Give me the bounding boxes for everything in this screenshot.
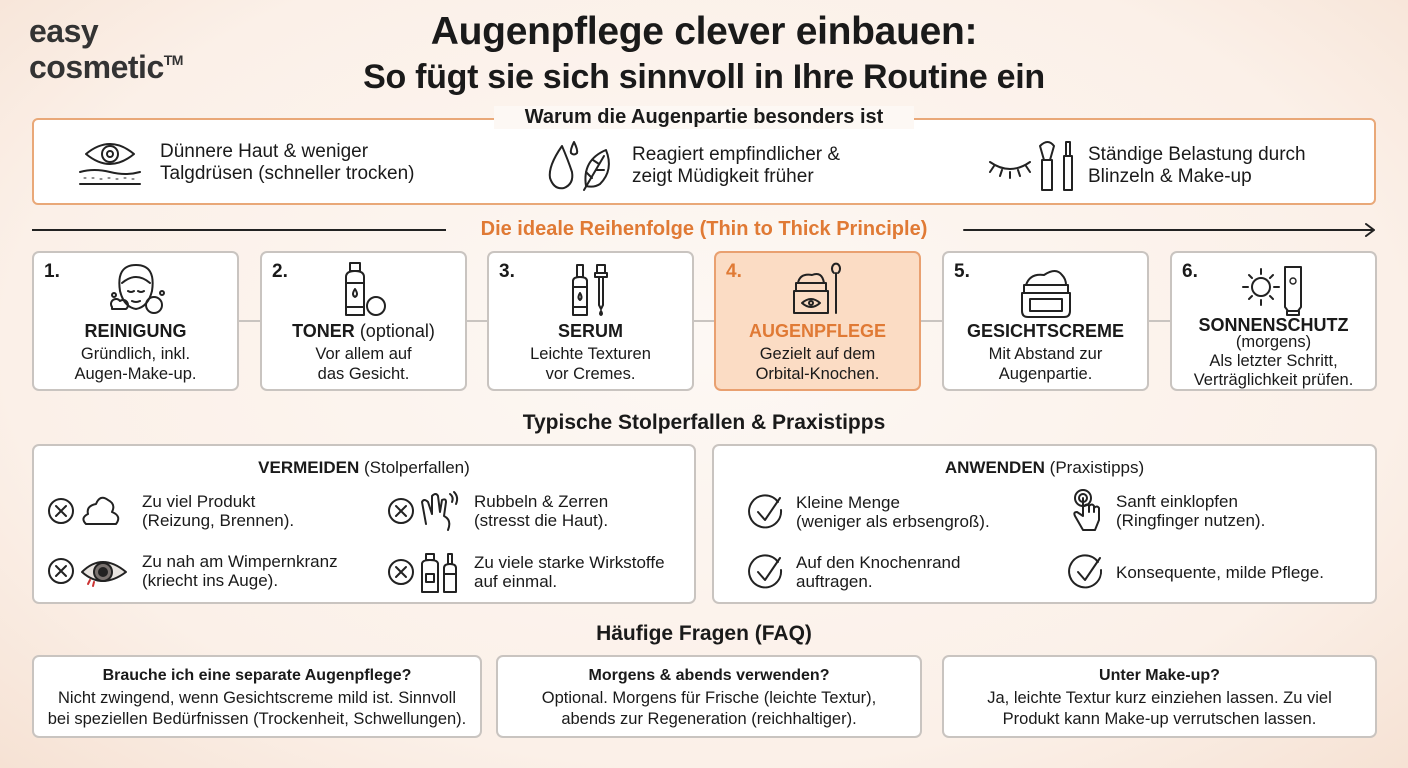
- step 3: [487, 251, 694, 391]
- step 1: REINIGUNG: [84, 321, 186, 341]
- faq 2: abends zur Regeneration (reichhaltiger).: [561, 710, 857, 728]
- item: too much product: [48, 492, 294, 530]
- step 4 (highlighted): AUGENPFLEGE: [749, 321, 886, 341]
- faq 2: Optional. Morgens für Frische (leichte Textur),: [542, 689, 876, 707]
- heading: apply: ANWENDEN (Praxistipps): [945, 458, 1144, 477]
- step 4 (highlighted): 4.: [726, 261, 742, 282]
- item: bone edge: [748, 553, 960, 591]
- icon: serum droppers: [572, 264, 608, 316]
- title: So fügt sie sich sinnvoll in Ihre Routine ein: [363, 58, 1045, 96]
- heading: pitfalls & tips: Typische Stolperfallen & Praxistipps: [523, 411, 885, 434]
- item: rubbing: [388, 491, 608, 531]
- faq 1: [32, 655, 482, 738]
- faq 1: Nicht zwingend, wenn Gesichtscreme mild ist. Sinnvoll: [58, 689, 456, 707]
- icon: sun and sunscreen: [1242, 266, 1302, 316]
- panel: avoid: [32, 444, 696, 604]
- step 5: GESICHTSCREME: [967, 321, 1124, 341]
- item: too many actives: [388, 553, 665, 593]
- item: bone edge: auftragen.: [796, 572, 873, 591]
- icon: face cleansing: [110, 264, 165, 314]
- step 2: 2.: [272, 261, 288, 282]
- item: rubbing: Rubbeln & Zerren: [474, 492, 608, 511]
- faq 3: Produkt kann Make-up verrutschen lassen.: [1003, 710, 1316, 728]
- arrow: [963, 223, 1375, 237]
- step 5: 5.: [954, 261, 970, 282]
- item: tap gently: (Ringfinger nutzen).: [1116, 511, 1265, 530]
- item: thin skin: [79, 141, 415, 185]
- heading: FAQ: Häufige Fragen (FAQ): [596, 622, 812, 645]
- step 4 (highlighted): Orbital-Knochen.: [756, 365, 879, 383]
- item: too close to lashes: (kriecht ins Auge).: [142, 571, 278, 590]
- item: sensitive: zeigt Müdigkeit früher: [632, 166, 814, 187]
- logo: cosmeticTM: [29, 49, 183, 85]
- item: tap gently: [1073, 489, 1265, 531]
- step 6: (morgens): [1236, 333, 1311, 351]
- heading: why: Warum die Augenpartie besonders ist: [525, 106, 883, 128]
- item: too many actives: Zu viele starke Wirkstoffe: [474, 553, 665, 572]
- step 1: 1.: [44, 261, 60, 282]
- icon: toner bottle: [345, 262, 386, 316]
- faq 2: [496, 655, 922, 738]
- faq 1: bei speziellen Bedürfnissen (Trockenheit, Schwellungen).: [48, 710, 466, 728]
- step 4 (highlighted): Gezielt auf dem: [760, 345, 875, 363]
- item: blinking & makeup: Ständige Belastung durch: [1088, 144, 1306, 165]
- icon: face cream jar: [1021, 270, 1071, 318]
- item: blinking & makeup: Blinzeln & Make-up: [1088, 166, 1252, 187]
- item: too much product: Zu viel Produkt: [142, 492, 255, 511]
- panel: why eye area: [32, 118, 1376, 205]
- step 2: Vor allem auf: [315, 345, 412, 363]
- step 6: SONNENSCHUTZ: [1198, 315, 1348, 335]
- faq 3: Unter Make-up?: [1099, 667, 1220, 684]
- item: tap gently: Sanft einklopfen: [1116, 492, 1238, 511]
- item: small amount: (weniger als erbsengroß).: [796, 512, 990, 531]
- step 6: 6.: [1182, 261, 1198, 282]
- faq 1: Brauche ich eine separate Augenpflege?: [103, 667, 411, 684]
- item: too close to lashes: [48, 552, 338, 590]
- faq 2: Morgens & abends verwenden?: [589, 667, 829, 684]
- step 1: Augen-Make-up.: [74, 365, 196, 383]
- heading: avoid: VERMEIDEN (Stolperfallen): [258, 458, 470, 477]
- step 3: 3.: [499, 261, 515, 282]
- step 4 (highlighted): [714, 251, 921, 391]
- step 6: [1170, 251, 1377, 391]
- icon: eye cream jar: [793, 262, 841, 314]
- step 3: Leichte Texturen: [530, 345, 651, 363]
- step 1: Gründlich, inkl.: [81, 345, 190, 363]
- step 6: Verträglichkeit prüfen.: [1194, 371, 1353, 389]
- title: [363, 10, 1045, 96]
- logo: [29, 13, 183, 85]
- item: bone edge: Auf den Knochenrand: [796, 553, 960, 572]
- step 6: Als letzter Schritt,: [1209, 352, 1338, 370]
- step 3: SERUM: [558, 321, 623, 341]
- item: consistent care: [1068, 554, 1324, 588]
- faq 3: Ja, leichte Textur kurz einziehen lassen. Zu viel: [987, 689, 1332, 707]
- title: Augenpflege clever einbauen:: [431, 10, 977, 53]
- item: too much product: (Reizung, Brennen).: [142, 511, 294, 530]
- item: blinking & makeup: [988, 141, 1306, 191]
- item: small amount: Kleine Menge: [796, 493, 900, 512]
- faq 3: [942, 655, 1377, 738]
- step 2: das Gesicht.: [318, 365, 409, 383]
- item: too close to lashes: Zu nah am Wimpernkranz: [142, 552, 338, 571]
- item: rubbing: (stresst die Haut).: [474, 511, 608, 530]
- step 5: [942, 251, 1149, 391]
- step 2: [260, 251, 467, 391]
- step 3: vor Cremes.: [546, 365, 635, 383]
- arrow: sequence line: [32, 229, 446, 231]
- step 1: [32, 251, 239, 391]
- item: consistent care: Konsequente, milde Pflege.: [1116, 562, 1324, 582]
- step 5: Augenpartie.: [999, 365, 1092, 383]
- item: too many actives: auf einmal.: [474, 572, 557, 591]
- connector line: [32, 320, 1376, 322]
- heading: sequence: Die ideale Reihenfolge (Thin to Thick Principle): [481, 218, 927, 240]
- item: sensitive: Reagiert empfindlicher &: [632, 144, 840, 165]
- logo: easy: [29, 13, 98, 49]
- step 5: Mit Abstand zur: [989, 345, 1102, 363]
- item: small amount: [748, 493, 990, 531]
- item: sensitive: [548, 141, 840, 191]
- item: thin skin: Dünnere Haut & weniger: [160, 141, 368, 162]
- step 2: TONER (optional): [292, 321, 435, 341]
- panel: apply: [712, 444, 1377, 604]
- item: thin skin: Talgdrüsen (schneller trocken): [160, 163, 415, 184]
